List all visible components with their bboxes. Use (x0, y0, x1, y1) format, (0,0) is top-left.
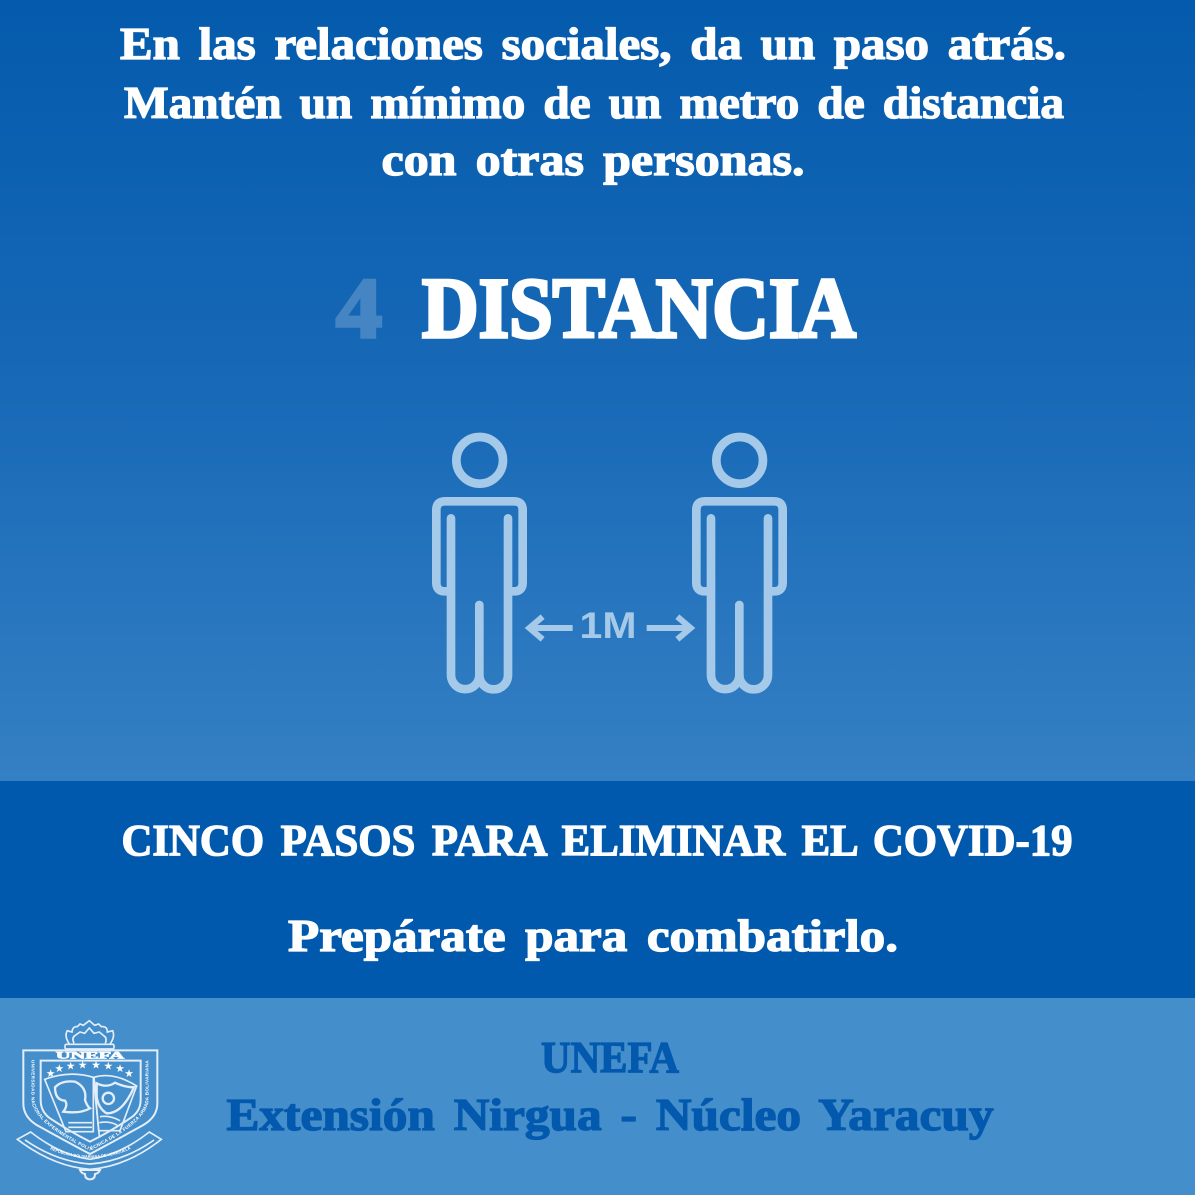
logo inner shield (41, 1061, 141, 1142)
logo curved motto: UNIVERSIDAD NACIONAL EXPERIMENTAL POLITÉCNICA DE LA FUERZA ARMADA BOLIVARIANA (31, 1060, 148, 1151)
logo flame inner (73, 1028, 106, 1043)
footer text (226, 1033, 994, 1140)
intro text: Mantén un mínimo de un metro de distancia (124, 78, 1064, 128)
label: 1M: 1M (580, 605, 636, 646)
heading: 4 DISTANCIA: DISTANCIA (422, 260, 856, 356)
logo stars: ★ (124, 1067, 134, 1080)
logo stars: ★ (91, 1058, 101, 1071)
panel: dark blue band (0, 781, 1195, 998)
band subheading: Prepárate para combatirlo. (288, 911, 898, 961)
panel: gradient background (0, 0, 1195, 781)
logo stars: ★ (55, 1062, 64, 1075)
logo coat of arms (97, 1083, 134, 1113)
footer text: Extensión Nirgua - Núcleo Yaracuy (226, 1090, 994, 1140)
logo torch base (65, 1044, 114, 1049)
arrow: left (529, 617, 573, 639)
icon: two people one metre apart (436, 437, 783, 689)
logo stars: ★ (66, 1060, 75, 1073)
intro text (120, 19, 1066, 185)
logo outer shield (23, 1050, 157, 1154)
intro text: En las relaciones sociales, da un paso atrás. (120, 19, 1066, 69)
band heading: CINCO PASOS PARA ELIMINAR EL COVID-19 (122, 816, 1072, 865)
logo band name: UNEFA (56, 1052, 125, 1062)
logo open book (45, 1074, 137, 1136)
logo stars: ★ (115, 1062, 125, 1075)
logo flame (66, 1021, 114, 1044)
heading: 4 DISTANCIA: 4 (336, 260, 382, 356)
logo stars: ★ (46, 1067, 55, 1080)
intro text: con otras personas. (382, 135, 804, 185)
panel: footer (0, 998, 1195, 1195)
logo: UNEFA emblem (16, 1020, 163, 1180)
footer text: UNEFA (541, 1033, 679, 1082)
icon: right person (696, 437, 783, 689)
arrow: right (647, 617, 691, 639)
logo ribbon (17, 1132, 161, 1169)
logo ribbon text: REPÚBLICA BOLIVARIANA DE VENEZUELA (50, 1146, 131, 1158)
logo stars: ★ (78, 1058, 87, 1071)
logo stars: ★ (104, 1060, 113, 1073)
logo stars (46, 1058, 134, 1080)
logo pendant (80, 1170, 100, 1179)
logo bust portrait (55, 1081, 90, 1112)
icon: left person (436, 437, 523, 689)
